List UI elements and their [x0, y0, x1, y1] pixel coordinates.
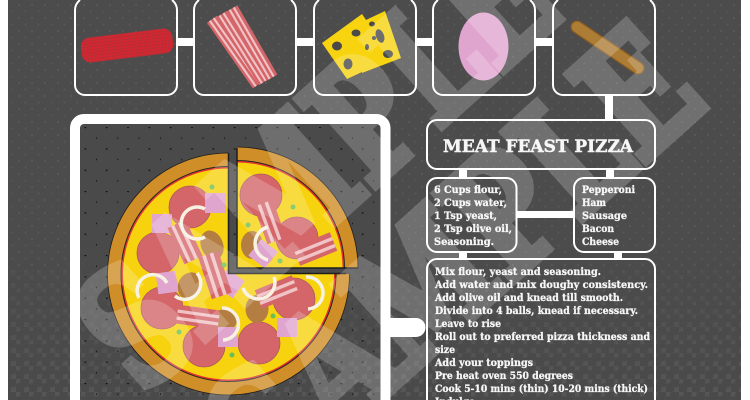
- method box: Pre heat oven 550 degrees: [435, 370, 573, 382]
- ingredients box: 2 Cups water,: [434, 197, 507, 209]
- ingredients box: 6 Cups flour,: [434, 184, 502, 196]
- icon box: bacon: [194, 0, 296, 95]
- connectors: recipe boxes: [459, 96, 622, 259]
- sausage pieces: [173, 227, 268, 331]
- toppings box: Cheese: [582, 236, 619, 248]
- toppings box: Pepperoni: [582, 184, 635, 196]
- ham squares: [152, 193, 297, 347]
- title box: [427, 120, 655, 169]
- pizza, separated slice: [237, 146, 358, 268]
- toppings box: [574, 178, 655, 252]
- method box: Add your toppings: [434, 357, 533, 369]
- ingredients box: [427, 178, 516, 252]
- method box: Divide into 4 balls, knead if necessary.: [435, 305, 638, 317]
- method box: size: [435, 344, 455, 356]
- icon box: pepperoni: [75, 0, 177, 95]
- herbs: [176, 184, 276, 358]
- ingredient icon row: [75, 0, 655, 95]
- toppings box: Bacon: [582, 223, 614, 235]
- icon box: ham: [433, 0, 535, 95]
- slice outline: [237, 148, 358, 268]
- method box: [427, 259, 655, 400]
- method box: Add water and mix doughy consistency.: [434, 279, 648, 291]
- connector: pizza panel to method: [385, 318, 426, 337]
- method box: Roll out to preferred pizza thickness and: [435, 331, 651, 343]
- method box: Mix flour, yeast and seasoning.: [435, 266, 601, 278]
- onion rings: [137, 207, 323, 340]
- toppings box: Ham: [582, 197, 606, 209]
- ingredients box: 1 Tsp yeast,: [434, 210, 497, 222]
- pizza, main part: [108, 153, 350, 395]
- toppings box: Sausage: [582, 210, 627, 222]
- connectors between icon boxes: [178, 38, 552, 46]
- icon box: cheese: [314, 0, 416, 95]
- notch outline: [228, 153, 346, 274]
- method box: Add olive oil and knead till smooth.: [434, 292, 623, 304]
- method box: Cook 5-10 mins (thin) 10-20 mins (thick): [435, 383, 648, 395]
- ingredients box: 2 Tsp olive oil,: [434, 223, 512, 235]
- bacon strips: [167, 220, 299, 329]
- icon box: sausage: [553, 0, 655, 95]
- method box: Leave to rise: [435, 318, 501, 330]
- pepperoni slices: [137, 186, 315, 367]
- title: MEAT FEAST PIZZA: [443, 137, 634, 157]
- panel: pizza illustration: [75, 119, 386, 400]
- ingredients box: Seasoning.: [434, 236, 494, 248]
